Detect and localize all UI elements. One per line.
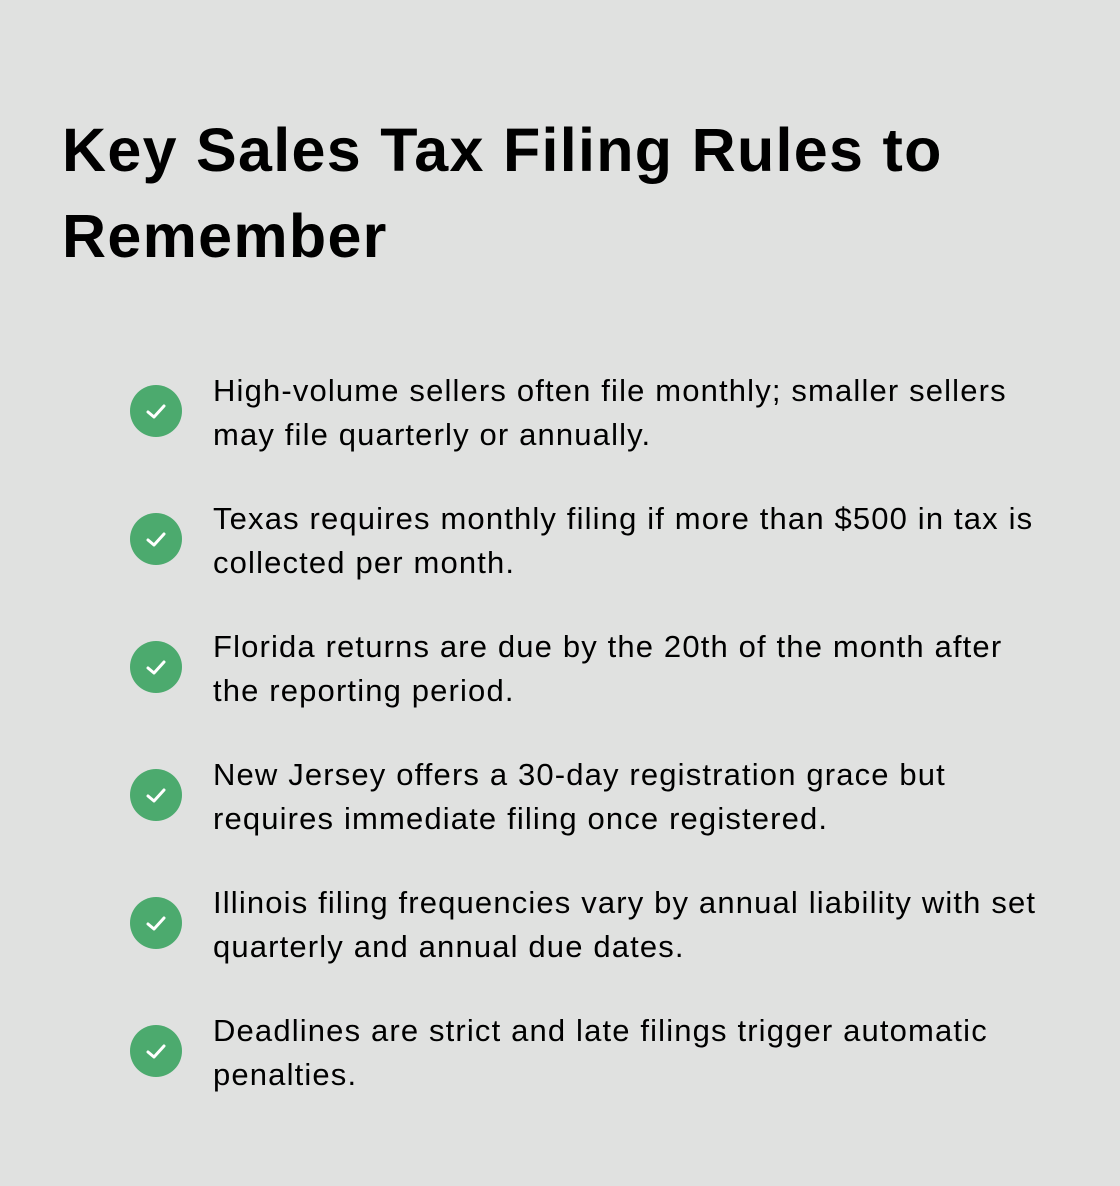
text <box>213 629 1002 708</box>
text <box>213 757 946 836</box>
text: Illinois filing frequencies vary by annual liability with set <box>213 885 1036 920</box>
text: Deadlines are strict and late filings trigger automatic <box>213 1013 988 1048</box>
text: High-volume sellers often file monthly; smaller sellers <box>213 373 1007 408</box>
text <box>213 373 1007 452</box>
item 1 <box>130 373 1007 452</box>
title: Remember <box>62 202 388 270</box>
text <box>213 1013 988 1092</box>
text: may file quarterly or annually. <box>213 417 651 452</box>
text <box>213 501 1033 580</box>
icon: check <box>130 385 182 437</box>
text: collected per month. <box>213 545 515 580</box>
text: Texas requires monthly filing if more than $500 in tax is <box>213 501 1033 536</box>
text: quarterly and annual due dates. <box>213 929 685 964</box>
icon: check <box>130 769 182 821</box>
text: requires immediate filing once registered. <box>213 801 828 836</box>
item 5 <box>130 885 1036 964</box>
text: New Jersey offers a 30-day registration grace but <box>213 757 946 792</box>
text: the reporting period. <box>213 673 515 708</box>
item 4 <box>130 757 946 836</box>
icon: check <box>130 513 182 565</box>
title <box>62 116 943 270</box>
icon: check <box>130 641 182 693</box>
text: Florida returns are due by the 20th of the month after <box>213 629 1002 664</box>
text: penalties. <box>213 1057 357 1092</box>
icon: check <box>130 897 182 949</box>
title: Key Sales Tax Filing Rules to <box>62 116 943 184</box>
icon: check <box>130 1025 182 1077</box>
item 6 <box>130 1013 988 1092</box>
item 3 <box>130 629 1002 708</box>
text <box>213 885 1036 964</box>
item 2 <box>130 501 1033 580</box>
